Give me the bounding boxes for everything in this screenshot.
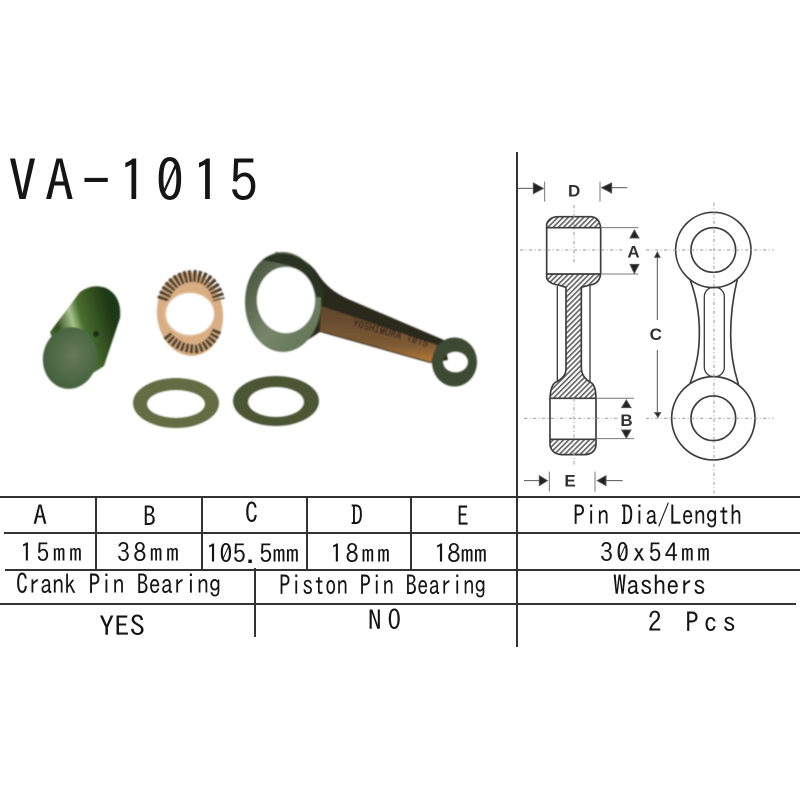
table: included parts headers: Washers [613,572,706,599]
table: included parts values [99,607,736,640]
table: included parts headers: Piston Pin Bearing [279,572,486,599]
icon: connecting rod [245,252,477,387]
dimension letters [564,182,662,491]
side view of rod [545,182,638,492]
icon: crank pin [38,286,120,393]
table: included parts values: 2 Pcs [648,609,736,636]
table: dimension values [20,540,710,567]
dimension letters: E [564,472,576,491]
table: dimension headers: B [143,503,156,530]
table: dimension values: 105.5mm [206,541,299,567]
table: dimension values: 30x54mm [600,540,710,566]
table: included parts headers [16,571,706,599]
table: dimension values: 15mm [20,540,82,566]
dimension letters: B [620,411,633,430]
table: included parts values: YES [99,613,145,640]
technical diagram [518,182,773,493]
title: VA-1015 [8,151,258,209]
dimension letters: D [568,182,580,201]
front view of rod [672,212,755,460]
table: dimension headers: E [457,503,469,530]
icon: left washer [133,378,219,428]
table: dimension headers: D [351,502,363,529]
icon: right washer [233,376,319,426]
table: included parts values: NO [368,607,401,634]
table: included parts headers: Crank Pin Bearing [16,571,221,598]
icon: needle bearing [153,269,227,359]
table: dimension values: 18mm [330,541,390,567]
table: dimension headers: A [33,502,47,529]
dimension arrows [518,183,661,486]
table: dimension headers [33,500,742,530]
photo: connecting rod kit [38,252,477,428]
dimension letters: C [650,325,662,344]
table grid [0,152,800,647]
center lines [520,203,773,493]
table: dimension values: 38mm [117,540,179,566]
dimension letters: A [627,243,640,262]
table: dimension headers: Pin Dia/Length [573,502,742,529]
icon: connecting rod: YOSHIMURA 1015 [351,318,429,349]
table: dimension headers: C [245,500,258,527]
table: dimension values: 18mm [434,541,487,567]
